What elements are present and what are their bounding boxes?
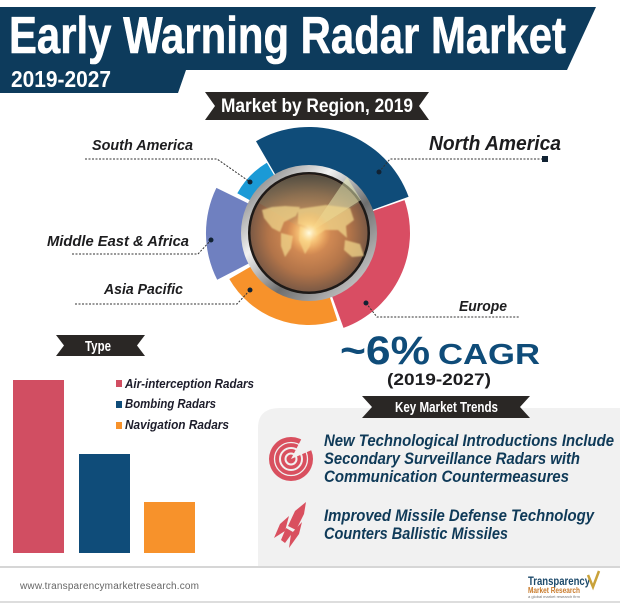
label: Asia Pacific (75, 281, 252, 304)
legend: type: Bombing Radars (125, 397, 216, 411)
label: Europe: Europe (459, 298, 507, 315)
footer (0, 566, 620, 603)
icon: radar (269, 436, 314, 481)
label: Asia Pacific: Asia Pacific (103, 281, 184, 298)
label: Middle East and Africa: Middle East & Africa (47, 233, 189, 250)
label: Europe (364, 298, 520, 317)
segment: Asia Pacific (229, 263, 337, 325)
legend: type: Air-interception Radars (124, 377, 254, 391)
title banner (0, 7, 596, 93)
label: South America: South America (92, 137, 193, 154)
panel: key market trends: Secondary Surveillance Radars with (324, 449, 580, 468)
CAGR callout (340, 329, 540, 389)
heading: key market trends: Key Market Trends (395, 399, 498, 416)
segment: Europe (330, 200, 410, 328)
segment: Middle East and Africa (206, 188, 256, 280)
heading: key market trends (362, 396, 530, 418)
bar chart: type (13, 380, 195, 553)
bar: Bombing Radars (79, 454, 130, 553)
heading: type: Type (85, 338, 111, 355)
bar: Navigation Radars (144, 502, 195, 553)
CAGR period: (2019-2027) (387, 370, 491, 389)
icon: rocket (274, 502, 306, 548)
donut chart: market by region (206, 127, 410, 328)
segment: South America (237, 163, 278, 204)
heading: market by region (205, 92, 429, 120)
heading: market by region: Market by Region, 2019 (221, 96, 413, 117)
website url: www.transparencymarketresearch.com (19, 581, 199, 592)
panel: key market trends: Communication Countermeasures (324, 467, 569, 486)
CAGR callout: CAGR (438, 339, 540, 371)
logo: Transparency (528, 574, 590, 588)
CAGR callout: ~6% (340, 329, 430, 373)
label: North America: North America (429, 133, 561, 155)
panel: key market trends: Counters Ballistic Missiles (324, 524, 508, 543)
logo (528, 571, 599, 599)
panel: key market trends (258, 408, 620, 566)
label: North America (376, 133, 561, 174)
logo: a global market research firm (528, 595, 580, 599)
segment: North America (256, 127, 409, 212)
legend: type: Navigation Radars (125, 418, 229, 432)
label: South America (85, 137, 252, 184)
heading: type (56, 335, 145, 356)
subtitle years: 2019-2027 (11, 66, 111, 92)
bar: Air-interception Radars (13, 380, 64, 553)
logo: Market Research (528, 586, 580, 595)
radar globe (241, 165, 377, 301)
legend: type (116, 377, 254, 432)
